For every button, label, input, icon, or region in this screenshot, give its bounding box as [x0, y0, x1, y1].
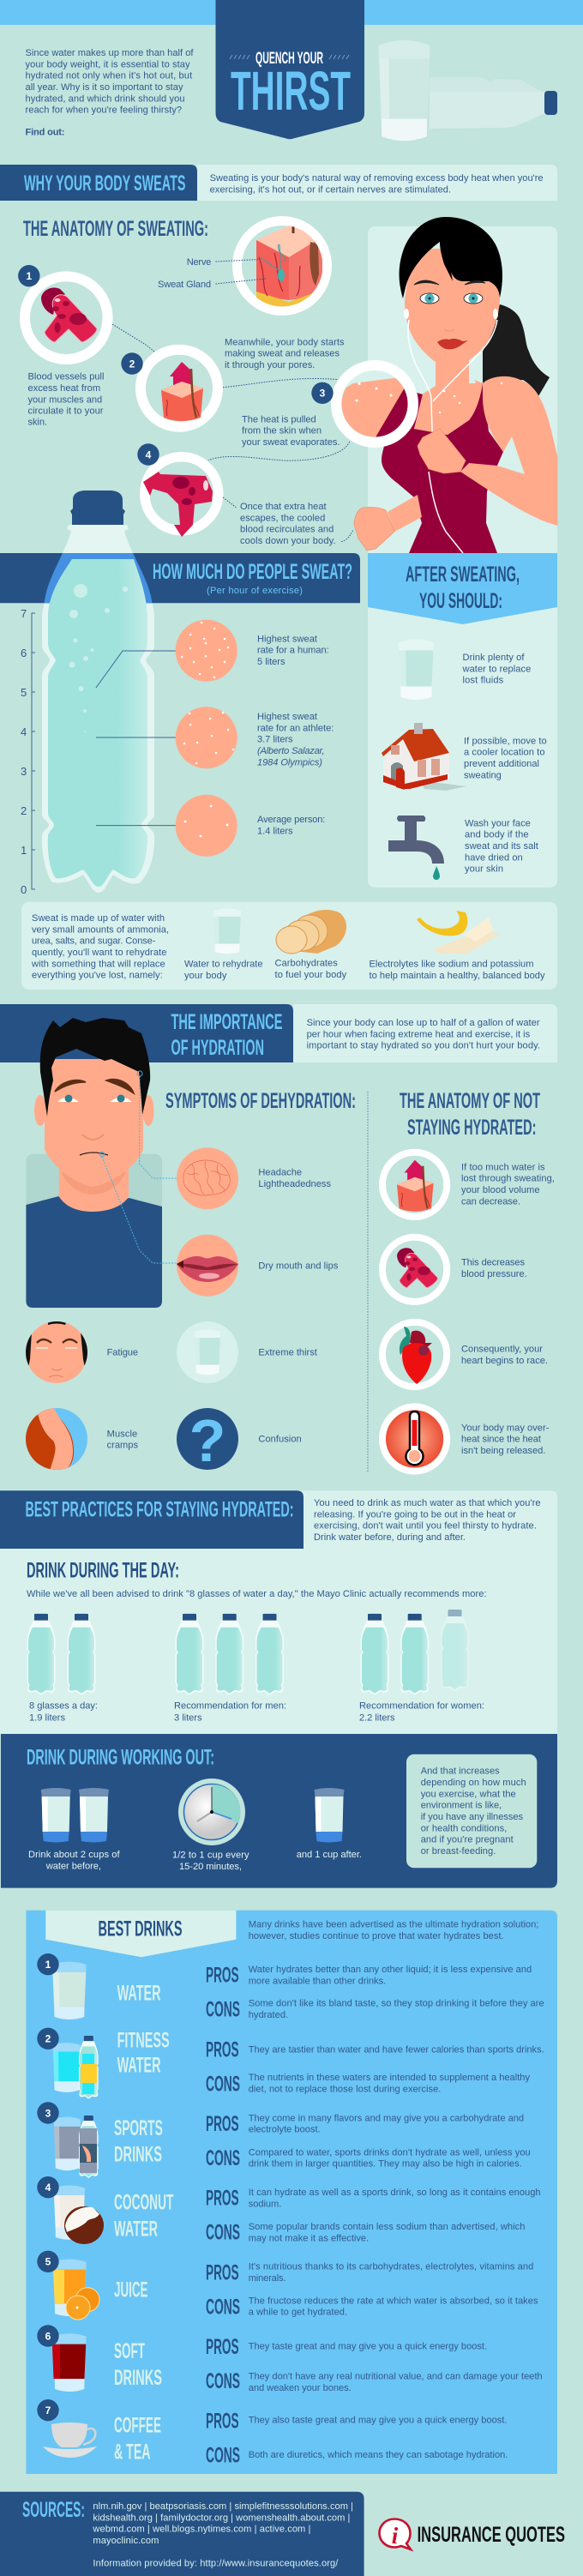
- title banner: THIRST: [231, 60, 351, 122]
- panel: drink during working out: [1, 1734, 557, 1888]
- section header: why your body sweats: WHY YOUR BODY SWEATS: [24, 172, 186, 196]
- callout: average person: 1.4 liters: [257, 826, 293, 836]
- step 4: cools down your body.: [240, 536, 336, 546]
- symptom: extreme thirst: [177, 1321, 317, 1383]
- callout: increases depending: you exercise, what the: [421, 1789, 516, 1799]
- after sweating: cooler location: If possible, move to: [464, 736, 547, 746]
- drink 3: sports drinks: DRINKS: [114, 2144, 162, 2167]
- callout: highest sweat rate athlete: (Alberto Salazar,: [257, 746, 324, 756]
- axis: liters scale: 2: [21, 804, 27, 817]
- title banner: QUENCH YOUR: [255, 49, 323, 68]
- sources: [0, 2492, 364, 2576]
- after sweating: drink water: [399, 640, 531, 700]
- panel: drink during working out: 15-20 minutes,: [179, 1862, 242, 1872]
- section header: importance of hydration: Since your body can lose up to half of a gallon of water: [307, 1018, 540, 1028]
- sources: kidshealth.org | familydoctor.org | womenshealth.about.com |: [93, 2513, 350, 2523]
- intro text: your body weight, it is essential to stay: [26, 59, 190, 69]
- step 1: skin.: [27, 418, 47, 428]
- effect: blood volume: can decrease.: [461, 1196, 520, 1207]
- bottles: men: Recommendation for men:: [174, 1701, 286, 1712]
- callout: highest sweat rate athlete: [96, 707, 334, 768]
- drink 2: fitness water: 2: [45, 2033, 51, 2045]
- panel: what to replace: Sweat is made up of water with: [32, 913, 165, 924]
- drink 3: sports drinks: They come in many flavors and may give you a carbohydrate and: [249, 2113, 524, 2123]
- drink 6: soft drinks: SOFT: [114, 2340, 145, 2363]
- drink 2: fitness water: FITNESS: [117, 2029, 170, 2052]
- step 1: your muscles and: [27, 394, 102, 405]
- drink 1: water: WATER: [117, 1982, 161, 2005]
- icon: lying bottle: [430, 77, 557, 129]
- step 2: making sweat and releases: [225, 349, 340, 359]
- symptom: muscle cramps: [26, 1406, 138, 1472]
- circle: sweat gland: [237, 221, 328, 310]
- drink 1: water: PROS: [206, 1965, 239, 1988]
- drink 4: coconut water: It can hydrate as well as a sports drink, so long as it contains enough: [249, 2188, 541, 2198]
- logo: insurance quotes: [379, 2519, 565, 2549]
- after sweating: wash face: sweat and its salt: [465, 841, 538, 852]
- step 3: The heat is pulled: [242, 414, 316, 424]
- callout: increases depending: depending on how much: [421, 1778, 526, 1788]
- intro text: all year. Why is it so important to stay: [26, 82, 183, 93]
- heading: symptoms of dehydration: SYMPTOMS OF DEHYDRATION:: [165, 1090, 356, 1113]
- drink 5: juice: The fructose reduces the rate at which water is absorbed, so it takes: [249, 2296, 538, 2306]
- panel: drink during working out: 1/2 to 1 cup every: [172, 1851, 249, 1861]
- drink 4: coconut water: PROS: [206, 2188, 239, 2211]
- axis: liters scale: 7: [21, 607, 27, 620]
- drink 5: juice: [37, 2251, 538, 2320]
- step 4: Once that extra heat: [240, 502, 327, 512]
- after sweating: drink water: water to replace: [461, 664, 531, 674]
- step 1: [18, 265, 108, 428]
- effect: blood pressure: blood pressure.: [461, 1269, 527, 1279]
- drink 6: soft drinks: PROS: [206, 2336, 239, 2359]
- effect: heart races: Consequently, your: [461, 1345, 543, 1355]
- panel: best drinks: Many drinks have been advertised as the ultimate hydration solution;: [249, 1920, 538, 1930]
- step 1: 1: [26, 270, 32, 282]
- step 4: [137, 443, 336, 546]
- symptom: confusion: [177, 1407, 302, 1474]
- icon: glass: [213, 908, 241, 954]
- panel: best practices: [0, 1490, 557, 1734]
- drink 5: juice: CONS: [206, 2296, 240, 2319]
- effect: blood volume: [382, 1153, 555, 1217]
- axis: liters scale: 0: [21, 883, 27, 896]
- callout: increases depending: or health conditions,: [421, 1823, 507, 1833]
- panel: best practices: releasing. If you're going to be out in the heat or: [314, 1509, 516, 1520]
- icon: clock: [178, 1779, 245, 1845]
- effect: blood volume: If too much water is: [461, 1162, 545, 1172]
- after sweating: wash face: your skin: [465, 864, 503, 875]
- after sweating: cooler location: sweating: [464, 770, 502, 780]
- symptom: headache: [177, 1147, 331, 1209]
- drink 2: fitness water: WATER: [117, 2055, 161, 2078]
- panel: what to replace: Carbohydrates: [274, 959, 338, 969]
- sources: mayoclinic.com: [93, 2536, 159, 2546]
- axis: liters scale: [21, 607, 35, 896]
- drink 4: coconut water: CONS: [206, 2222, 240, 2245]
- panel: best practices: While we've all been advised to drink "8 glasses of water a day," the Mayo Clinic actually recommends more:: [27, 1589, 487, 1599]
- intro text: reach for when you're feeling thirsty?: [26, 105, 182, 116]
- drink 7: coffee and tea: [37, 2399, 508, 2468]
- step 2: [121, 337, 345, 427]
- drink 3: sports drinks: electrolyte boost.: [249, 2125, 321, 2135]
- sources: webmd.com | well.blogs.nytimes.com | active.com |: [92, 2525, 310, 2535]
- drink 6: soft drinks: [37, 2325, 543, 2393]
- symptom: confusion: ?: [189, 1407, 225, 1474]
- illustration: dehydrated man: [26, 1018, 177, 1308]
- step 4: escapes, the cooled: [240, 513, 325, 523]
- callout: average person: [96, 795, 325, 857]
- section header: why your body sweats: Sweating is your body's natural way of removing excess body heat when you're: [210, 173, 544, 184]
- callout: highest sweat rate athlete: rate for an athlete:: [257, 723, 334, 733]
- icon: glass of water: [379, 40, 430, 141]
- panel: what to replace: to help maintain a healthy, balanced body: [369, 971, 545, 981]
- header text: how much do people sweat: HOW MUCH DO PEOPLE SWEAT?: [153, 561, 352, 584]
- bottle shoulder over header: [45, 553, 153, 604]
- drink 2: fitness water: CONS: [206, 2073, 240, 2096]
- banner: after sweating: [368, 553, 557, 624]
- drink 4: coconut water: WATER: [114, 2218, 158, 2242]
- icon: two glasses: [41, 1788, 109, 1842]
- step 1: excess heat from: [27, 383, 100, 394]
- step 3: your sweat evaporates.: [242, 437, 340, 448]
- step 1: Blood vessels pull: [27, 372, 105, 382]
- effect: overheating: heat since the heat: [461, 1435, 541, 1445]
- intro text: hydrated not only when it's hot out, but: [26, 71, 192, 81]
- after sweating: wash face: have dried on: [465, 852, 523, 863]
- tag: best drinks: [45, 1911, 236, 1957]
- drink 7: coffee and tea: 7: [45, 2404, 51, 2417]
- labels: nerve and sweat gland: [158, 257, 266, 290]
- callout: highest sweat rate human: 5 liters: [257, 657, 285, 667]
- effect: heart races: heart begins to race.: [461, 1356, 548, 1366]
- drink 6: soft drinks: 6: [45, 2330, 51, 2342]
- drink 7: coffee and tea: & TEA: [114, 2441, 151, 2465]
- panel: what to replace: [21, 902, 557, 990]
- logo: insurance quotes: i: [392, 2523, 399, 2549]
- panel: what to replace: your body: [184, 971, 227, 981]
- drink 7: coffee and tea: COFFEE: [114, 2415, 161, 2438]
- symptom: dry mouth: [177, 1235, 339, 1297]
- header text: how much do people sweat: (Per hour of exercise): [207, 586, 303, 596]
- after sweating: drink water: Drink plenty of: [463, 653, 525, 663]
- drink 6: soft drinks: and weaken your bones.: [249, 2383, 352, 2393]
- symptom: fatigue: [26, 1321, 138, 1383]
- drink 1: water: 1: [45, 1959, 51, 1971]
- drink 3: sports drinks: [37, 2102, 531, 2178]
- panel: best drinks: [26, 1911, 557, 2474]
- effect: overheating: isn't being released.: [461, 1446, 545, 1456]
- sources: SOURCES:: [22, 2499, 85, 2522]
- bottles: men: 3 liters: [174, 1713, 202, 1724]
- heading: the anatomy of sweating: THE ANATOMY OF SWEATING:: [23, 218, 208, 241]
- tag: best drinks: BEST DRINKS: [98, 1918, 182, 1941]
- header text: how much do people sweat: [153, 561, 352, 596]
- drink 3: sports drinks: 3: [45, 2107, 51, 2119]
- symptom: headache: Lightheadedness: [258, 1179, 331, 1189]
- icon: banana: [417, 911, 502, 954]
- step 1: circulate it to your: [27, 406, 104, 416]
- axis: liters scale: 3: [21, 765, 27, 778]
- bottles: 8 glasses a day: 1.9 liters: [29, 1713, 65, 1724]
- drink 4: coconut water: 4: [45, 2182, 51, 2194]
- connector 1 to 2: [112, 324, 154, 352]
- panel: what to replace: with something that will replace: [31, 959, 165, 969]
- drink 6: soft drinks: They don't have any real nutritional value, and can damage your teeth: [249, 2372, 543, 2382]
- drink 5: juice: JUICE: [114, 2278, 147, 2302]
- drink 1: water: more available than other drinks.: [249, 1976, 386, 1986]
- effect: heart races: [382, 1322, 548, 1387]
- labels: nerve and sweat gland: Sweat Gland: [158, 280, 211, 290]
- bottles: women: [359, 1610, 484, 1724]
- bottles: 8 glasses a day: [27, 1614, 98, 1724]
- callout: highest sweat rate human: Highest sweat: [257, 634, 317, 644]
- drink 4: coconut water: Some popular brands contain less sodium than advertised, which: [249, 2222, 525, 2232]
- panel: drink during working out: Drink about 2 cups of: [28, 1850, 121, 1860]
- symptom: headache: Headache: [258, 1168, 302, 1178]
- drink 1: water: Water hydrates better than any other liquid; it is less expensive and: [249, 1965, 532, 1975]
- panel: best practices: Drink water before, during and after.: [314, 1532, 466, 1543]
- step 3: 3: [320, 388, 326, 400]
- callout: increases depending: [406, 1754, 537, 1868]
- step 3: from the skin when: [242, 426, 322, 436]
- effect: blood pressure: [382, 1237, 527, 1302]
- bottles: 8 glasses a day: 8 glasses a day:: [29, 1701, 98, 1712]
- intro text: hydrated, and which drink should you: [26, 93, 185, 104]
- callout: increases depending: environment is like,: [421, 1801, 502, 1811]
- step 2: Meanwhile, your body starts: [225, 337, 345, 347]
- drink 3: sports drinks: PROS: [206, 2113, 239, 2136]
- effect: blood volume: lost through sweating,: [461, 1174, 555, 1184]
- after sweating: drink water: lost fluids: [463, 676, 504, 686]
- after sweating: cooler location: a cooler location to: [464, 748, 545, 758]
- drink 4: coconut water: may not make it as effective.: [249, 2233, 369, 2243]
- panel: what to replace: everything you've lost, namely:: [32, 971, 163, 981]
- sources: Information provided by: http://www.insurancequotes.org/: [93, 2559, 339, 2569]
- callout: highest sweat rate athlete: 3.7 liters: [257, 735, 293, 745]
- section header: importance of hydration: OF HYDRATION: [171, 1037, 264, 1060]
- heading: drink during the day: DRINK DURING THE DAY:: [27, 1559, 179, 1582]
- bottles: women: 2.2 liters: [359, 1713, 395, 1724]
- drink 1: water: Some don't like its bland taste, so they stop drinking it before they are: [249, 1999, 544, 2009]
- drink 4: coconut water: sodium.: [249, 2199, 281, 2209]
- banner: after sweating: YOU SHOULD:: [419, 590, 502, 613]
- drink 7: coffee and tea: They also taste great and may give you a quick energy boost.: [249, 2415, 508, 2425]
- symptom: muscle cramps: cramps: [107, 1441, 138, 1451]
- symptom: extreme thirst: Extreme thirst: [258, 1348, 317, 1358]
- intro text: [26, 48, 194, 138]
- after sweating: wash face: and body if the: [465, 830, 529, 840]
- section header: how much do people sweat: [0, 553, 360, 603]
- after sweating: wash face: [388, 816, 538, 880]
- drink 6: soft drinks: CONS: [206, 2370, 240, 2393]
- drink 1: water: CONS: [206, 1999, 240, 2022]
- panel: what to replace: quently, you'll want to rehydrate: [32, 948, 166, 958]
- top sky band: [0, 0, 583, 25]
- panel: best drinks: however, studies continue to prove that water hydrates best.: [249, 1931, 504, 1941]
- drink 1: water: hydrated.: [249, 2010, 288, 2020]
- panel: drink during working out: water before,: [45, 1861, 101, 1871]
- panel: what to replace: urea, salts, and sugar. Conse-: [32, 936, 156, 947]
- drink 5: juice: 5: [45, 2256, 51, 2268]
- callout: average person: Average person:: [257, 815, 325, 825]
- drink 2: fitness water: They are tastier than water and have fewer calories than sports drinks.: [249, 2045, 544, 2055]
- step 2: 2: [129, 358, 135, 370]
- icon: bread: [276, 910, 346, 954]
- illustration: woman: [354, 217, 557, 553]
- drink 6: soft drinks: They taste great and may give you a quick energy boost.: [249, 2341, 487, 2351]
- callout: increases depending: or breast-feeding.: [421, 1846, 496, 1857]
- symptom: confusion: Confusion: [258, 1435, 302, 1445]
- labels: nerve and sweat gland: Nerve: [187, 257, 211, 268]
- drink 7: coffee and tea: Both are diuretics, which means they can sabotage hydration.: [249, 2450, 508, 2460]
- step 3: [242, 365, 413, 448]
- sources: nlm.nih.gov | beatpsoriasis.com | simplefitnesssolutions.com |: [93, 2501, 353, 2512]
- drink 3: sports drinks: CONS: [206, 2147, 240, 2170]
- axis: liters scale: 6: [21, 647, 27, 659]
- step 4: blood recirculates and: [240, 525, 334, 535]
- drink 5: juice: minerals.: [249, 2273, 286, 2284]
- panel: woman and after sweating: [368, 226, 557, 888]
- drink 3: sports drinks: SPORTS: [114, 2117, 163, 2140]
- intro text: Since water makes up more than half of: [26, 48, 194, 58]
- symptom: dry mouth: Dry mouth and lips: [258, 1261, 339, 1271]
- drink 5: juice: It's nutritious thanks to its carbohydrates, electrolytes, vitamins and: [249, 2262, 533, 2272]
- section header: importance of hydration: important to stay hydrated so you don't hurt your body.: [307, 1041, 540, 1051]
- panel: best practices: exercising, don't wait until you feel thirsty to hydrate.: [314, 1521, 537, 1532]
- intro text: Find out:: [26, 128, 65, 138]
- section header: importance of hydration: [0, 1004, 557, 1062]
- panel: best practices: You need to drink as much water as that which you're: [314, 1498, 540, 1508]
- connectors at step 4: [223, 497, 353, 542]
- effect: overheating: Your body may over-: [461, 1423, 550, 1433]
- effect: blood pressure: This decreases: [461, 1258, 525, 1268]
- icon: one glass: [314, 1788, 345, 1842]
- axis: liters scale: 5: [21, 686, 27, 699]
- drink 7: coffee and tea: CONS: [206, 2445, 240, 2468]
- drink 2: fitness water: PROS: [206, 2038, 239, 2061]
- drink 2: fitness water: The nutrients in these waters are intended to supplement a healthy: [249, 2073, 530, 2083]
- drink 5: juice: a while to get hydrated.: [249, 2308, 347, 2318]
- symptom: muscle cramps: Muscle: [107, 1429, 137, 1439]
- drink 4: coconut water: [37, 2176, 541, 2245]
- bottles: women: Recommendation for women:: [359, 1701, 484, 1712]
- after sweating: wash face: Wash your face: [465, 818, 531, 828]
- panel: drink during working out: DRINK DURING WORKING OUT:: [27, 1746, 214, 1769]
- axis: liters scale: 4: [21, 725, 27, 738]
- section header: importance of hydration: THE IMPORTANCE: [171, 1011, 283, 1034]
- bottle body: [42, 525, 154, 893]
- effect: overheating: [382, 1406, 550, 1472]
- callout: highest sweat rate human: [96, 620, 329, 688]
- icon: big water bottle cap: [70, 491, 125, 525]
- connector 3 to 4: [208, 442, 350, 460]
- callout: highest sweat rate human: rate for a human:: [257, 646, 329, 656]
- bottle water: [48, 559, 147, 887]
- drink 3: sports drinks: drink them in larger quantities. They may also be high in calories.: [249, 2158, 522, 2169]
- title banner: [216, 0, 364, 139]
- callout: increases depending: and if you're pregnant: [421, 1835, 514, 1845]
- section header: why your body sweats: exercising, it's hot out, or if certain nerves are stimulated.: [210, 184, 451, 195]
- section header: why your body sweats: [0, 165, 557, 201]
- drink 7: coffee and tea: PROS: [206, 2410, 239, 2434]
- callout: increases depending: if you have any illnesses: [421, 1812, 523, 1822]
- drink 4: coconut water: COCONUT: [114, 2192, 173, 2215]
- drink 2: fitness water: diet, not to replace those lost during exercise.: [249, 2084, 441, 2094]
- section header: importance of hydration: per hour when facing extreme heat and exercise, it is: [307, 1029, 531, 1039]
- drink 5: juice: PROS: [206, 2261, 239, 2284]
- panel: what to replace: very small amounts of ammonia,: [32, 924, 169, 935]
- panel: drink during working out: and 1 cup after.: [297, 1850, 362, 1860]
- axis: liters scale: 1: [21, 844, 27, 857]
- callout: highest sweat rate athlete: 1984 Olympics): [257, 757, 322, 767]
- callout: highest sweat rate athlete: Highest sweat: [257, 712, 317, 722]
- symptom: fatigue: Fatigue: [107, 1348, 138, 1358]
- after sweating: cooler location: [382, 723, 547, 791]
- step 4: 4: [146, 448, 152, 460]
- panel: what to replace: Electrolytes like sodium and potassium: [369, 960, 533, 970]
- connector 2 to 3: [223, 378, 339, 388]
- header: best practices: [0, 1490, 304, 1549]
- bottles: men: [174, 1614, 286, 1724]
- header: best practices: BEST PRACTICES FOR STAYING HYDRATED:: [26, 1498, 293, 1521]
- drink 1: water: [37, 1953, 544, 2022]
- panel: what to replace: to fuel your body: [274, 970, 347, 980]
- drink 6: soft drinks: DRINKS: [114, 2367, 162, 2390]
- callout: increases depending: And that increases: [421, 1766, 500, 1777]
- step 2: it through your pores.: [225, 360, 315, 370]
- after sweating: cooler location: prevent additional: [464, 759, 539, 769]
- drink 3: sports drinks: Compared to water, sports drinks don't hydrate as well, unless you: [249, 2147, 531, 2158]
- heading: anatomy of not staying hydrated: [400, 1090, 540, 1140]
- drink 2: fitness water: [37, 2028, 544, 2099]
- panel: what to replace: Water to rehydrate: [184, 960, 262, 970]
- effect: blood volume: your blood volume: [461, 1185, 540, 1195]
